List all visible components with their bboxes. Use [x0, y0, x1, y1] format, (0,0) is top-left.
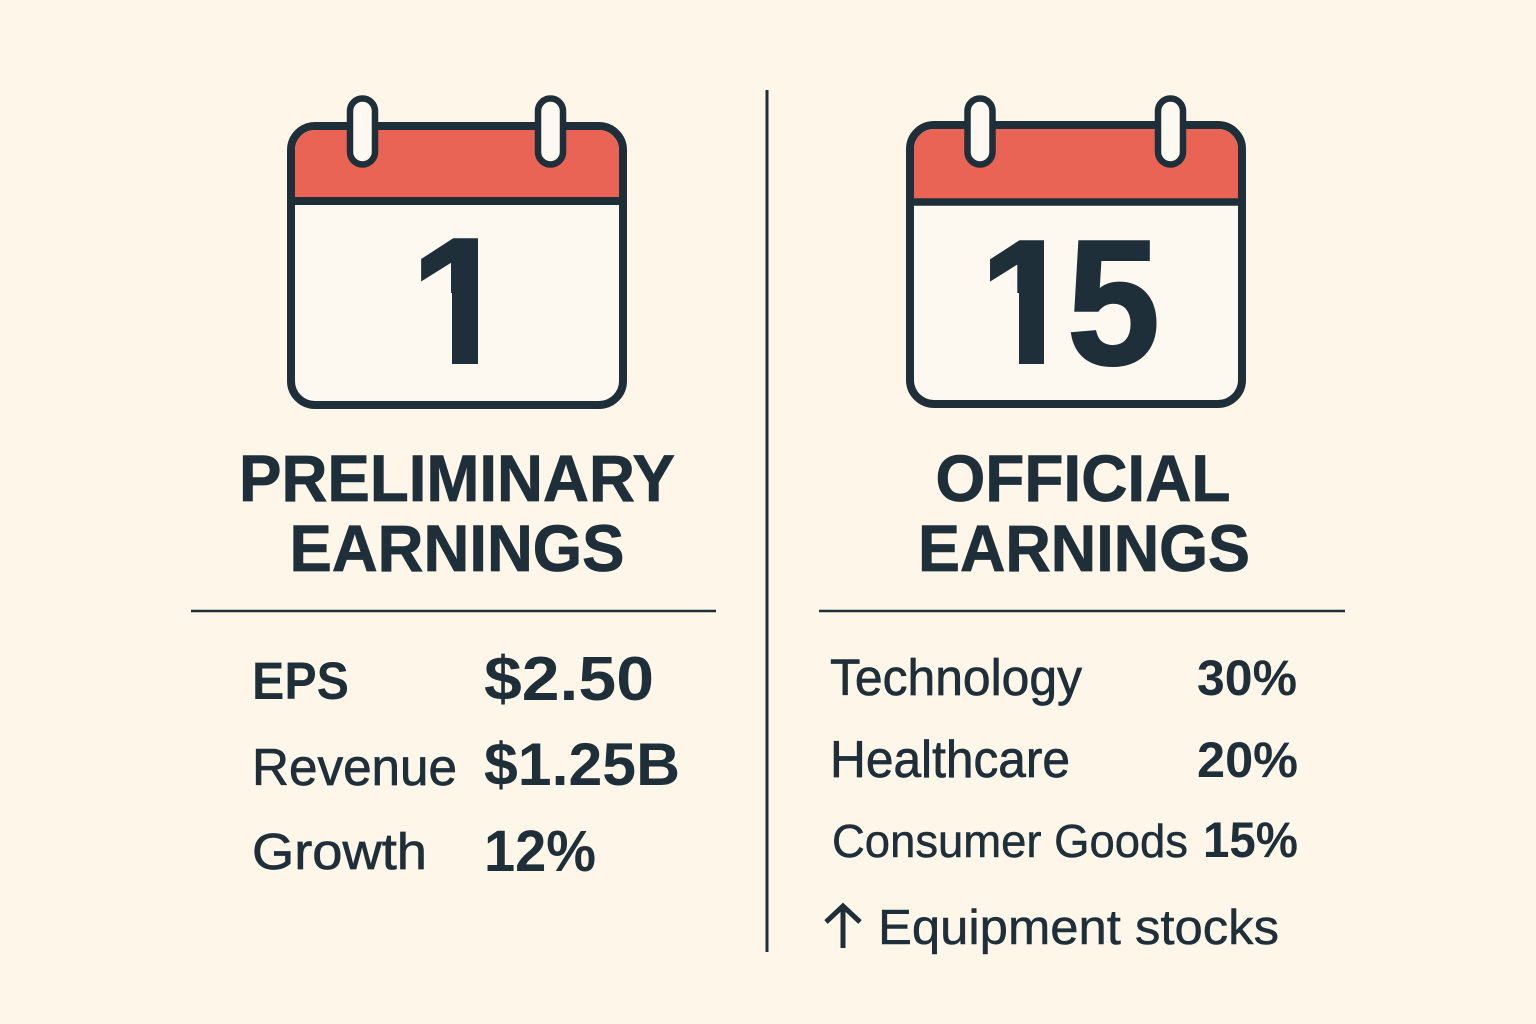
- panel: official earnings: [819, 98, 1345, 955]
- icon: calendar day 1: 1: [410, 201, 511, 403]
- sector: healthcare: [830, 731, 1298, 789]
- center divider: [766, 90, 768, 952]
- sector: technology: Technology: [830, 649, 1082, 706]
- metric: EPS: $2.50: [484, 645, 654, 714]
- sector: healthcare: 20%: [1197, 732, 1298, 788]
- sector: consumer goods: 15%: [1203, 812, 1298, 868]
- metric: growth: Growth: [252, 823, 427, 880]
- panel: preliminary earnings: [191, 98, 716, 884]
- sector: technology: [830, 649, 1297, 706]
- heading: official earnings: [918, 441, 1250, 585]
- metric: growth: 12%: [484, 819, 596, 884]
- metric: EPS: EPS: [252, 652, 349, 711]
- heading: preliminary earnings: [239, 441, 675, 585]
- metric: growth: [252, 819, 596, 884]
- heading: preliminary earnings: PRELIMINARY: [239, 441, 675, 515]
- icon: up arrow: [826, 906, 860, 948]
- icon: calendar day 15: [910, 98, 1242, 404]
- sector: technology: 30%: [1197, 650, 1297, 706]
- metric: revenue: $1.25B: [484, 731, 680, 798]
- icon: calendar day 15: 1: [977, 203, 1076, 402]
- sector: consumer goods: Consumer Goods: [832, 815, 1188, 867]
- icon: calendar day 15: 5: [1067, 203, 1160, 402]
- metric: revenue: [252, 731, 680, 798]
- metric: EPS: [252, 645, 654, 714]
- callout: equipment stocks: Equipment stocks: [878, 901, 1279, 955]
- icon: calendar day 1: [291, 98, 623, 405]
- heading: preliminary earnings: EARNINGS: [290, 511, 624, 585]
- metric: revenue: Revenue: [252, 739, 457, 797]
- heading: official earnings: OFFICIAL: [936, 441, 1230, 515]
- heading: official earnings: EARNINGS: [918, 511, 1250, 585]
- sector: healthcare: Healthcare: [830, 731, 1070, 789]
